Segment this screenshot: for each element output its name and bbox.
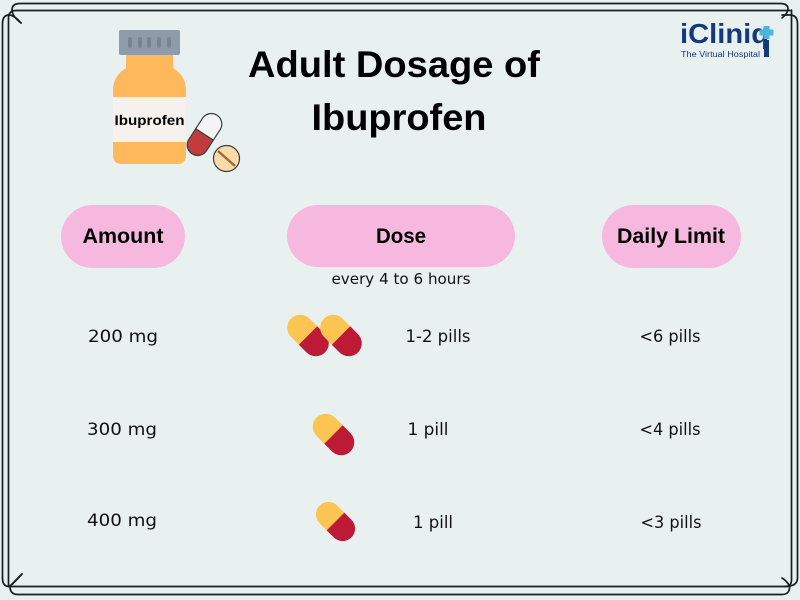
row: 300 mg [87,408,701,461]
logo: iCliniq: The Virtual Hospital [681,50,760,59]
row: 300 mg: 300 mg [87,420,157,440]
logo: iCliniq [680,18,774,59]
icon: capsule [311,497,360,546]
row: 200 mg: <6 pills [640,327,701,347]
header: Amount: Amount [82,225,164,248]
bottle cap [119,30,180,55]
icon: two capsules [282,309,367,362]
bottle body [113,55,186,164]
row: 400 mg: <3 pills [640,513,702,533]
logo: iCliniq: iCliniq [680,18,769,49]
row: 400 mg: 400 mg [87,511,157,531]
title: Ibuprofen [312,97,486,138]
row: 200 mg: 200 mg [88,327,158,347]
row: 400 mg: 1 pill [413,513,453,533]
header: Dose [287,205,515,267]
bottle label text: Ibuprofen [114,112,184,128]
dose note: every 4 to 6 hours [332,270,471,288]
icon: round tablet [214,146,240,172]
row: 200 mg [88,309,701,362]
header: Daily Limit [602,205,741,268]
header: Daily Limit: Daily Limit [617,225,725,248]
row: 200 mg: 1-2 pills [406,327,471,347]
header: Dose: Dose [376,225,426,248]
header: Amount [61,205,185,268]
row: 400 mg [87,497,702,546]
title [248,44,541,138]
icon: ibuprofen bottle and pills [113,30,240,172]
row: 300 mg: <4 pills [640,420,701,440]
icon: capsule [183,109,226,160]
bottle label [113,97,186,142]
logo plus [760,26,774,39]
icon: capsule [307,408,360,461]
row: 300 mg: 1 pill [408,420,448,440]
title: Adult Dosage of [248,44,541,85]
